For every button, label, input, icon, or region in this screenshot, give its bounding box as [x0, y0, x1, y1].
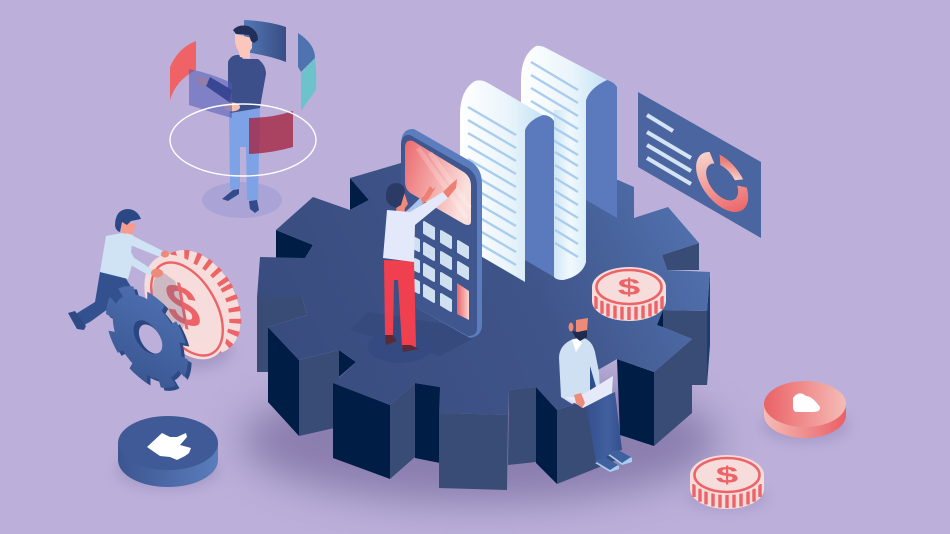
gear shadow on coin [150, 268, 186, 340]
calculator [401, 129, 482, 338]
heart button coin [761, 381, 849, 443]
shoes [385, 335, 419, 352]
back scroll bottom strip [554, 110, 586, 280]
dollar sign: $ [716, 462, 738, 488]
lower hand [151, 268, 163, 278]
neck [238, 50, 250, 59]
gear side walls [257, 178, 710, 490]
heart coin shadow [761, 407, 849, 443]
gear top face [257, 163, 710, 415]
gear teeth [110, 276, 184, 398]
gear ground shadow [240, 376, 720, 504]
head [235, 34, 252, 54]
torso [559, 338, 600, 404]
coin ring [694, 458, 760, 492]
hand on screen [443, 179, 457, 198]
hand front [224, 102, 240, 112]
coin edge [690, 475, 764, 509]
beard [572, 330, 587, 341]
screen glare [418, 148, 470, 218]
panel text lines [647, 115, 691, 184]
floor dollar coin [687, 455, 767, 511]
lower arm [122, 252, 153, 276]
thumbs icon [147, 433, 191, 460]
calculator body edge [401, 129, 482, 338]
hair [233, 26, 258, 43]
large central gear [257, 163, 710, 490]
translucent blue panel [189, 69, 232, 118]
calculator screen [405, 141, 471, 225]
paying coin on gear [592, 267, 666, 321]
sweater [228, 55, 266, 113]
person's leg [74, 272, 139, 327]
torso and raised arm [383, 180, 457, 262]
calculator keys [415, 222, 468, 311]
neck and face [396, 192, 408, 214]
seated person with laptop [559, 318, 632, 472]
hand [574, 393, 585, 408]
gear body [113, 280, 181, 394]
collar [572, 338, 582, 352]
like button coin [116, 416, 220, 490]
coin face [690, 455, 764, 495]
coin stripes [694, 484, 760, 508]
laptop [565, 376, 613, 408]
big coin [127, 235, 258, 374]
red equals key [457, 283, 469, 320]
back paper scroll [521, 46, 617, 280]
calculator front [401, 135, 477, 336]
orbit ring [170, 104, 316, 176]
head [576, 318, 588, 337]
coin edge [138, 235, 258, 369]
hair [115, 209, 141, 232]
hand left [195, 75, 209, 87]
gear depth [114, 278, 188, 402]
coin shadow [148, 330, 232, 370]
near shoe [595, 459, 619, 472]
back scroll white sheet [521, 46, 607, 280]
coin edge stripes [145, 243, 251, 361]
translucent red panel [249, 111, 293, 154]
front scroll blue reverse [525, 115, 554, 277]
shadow of calculator on gear [350, 312, 482, 356]
donut chart [701, 149, 743, 215]
right blue panel [298, 33, 315, 72]
floor disc [368, 331, 432, 363]
back scroll blue reverse [586, 80, 617, 218]
person at calculator [368, 179, 457, 363]
small gear [110, 276, 188, 402]
coin ring [596, 270, 662, 304]
hair [386, 183, 405, 208]
blue back panel [244, 20, 286, 62]
dollar sign: $ [618, 274, 640, 300]
left red panel [170, 41, 196, 100]
back scroll lines [531, 62, 578, 257]
coin edge [592, 287, 666, 321]
gear hole wall [134, 314, 160, 360]
coin ring [136, 250, 238, 368]
far arm [206, 77, 232, 102]
heart icon [793, 393, 820, 412]
small gear and big coin with pushing person [68, 209, 258, 402]
dollar sign: $ [160, 267, 205, 343]
coin face [127, 240, 245, 374]
heart coin top [764, 381, 846, 427]
like coin top [118, 416, 218, 470]
floor shadow [202, 182, 282, 218]
red trousers [384, 260, 416, 347]
ear [569, 322, 573, 332]
front scroll white sheet [460, 80, 543, 282]
chart panel [638, 92, 761, 238]
shoes [222, 189, 259, 213]
shoes [595, 450, 632, 472]
torso and arms [100, 209, 169, 279]
legs [586, 392, 622, 462]
coin stripes [596, 296, 662, 320]
far arm [405, 186, 436, 213]
heart coin side [764, 404, 846, 438]
like coin shadow [116, 450, 220, 490]
standing person with panels [170, 20, 316, 218]
upper arm [125, 233, 163, 257]
front scroll lines [468, 107, 516, 265]
body [100, 233, 134, 279]
front paper scroll [460, 80, 554, 282]
gear hole [139, 320, 162, 358]
neck and head [120, 222, 136, 239]
coin shadow [687, 483, 767, 511]
trousers [229, 108, 260, 200]
right teal panel [301, 58, 316, 111]
like coin side [118, 443, 218, 487]
hand [161, 250, 169, 258]
shoe [68, 311, 86, 330]
coin face [592, 267, 666, 307]
far shoe [608, 452, 632, 465]
donut small arc [720, 160, 739, 180]
donut large arc [701, 151, 743, 215]
arm shading [590, 366, 597, 395]
